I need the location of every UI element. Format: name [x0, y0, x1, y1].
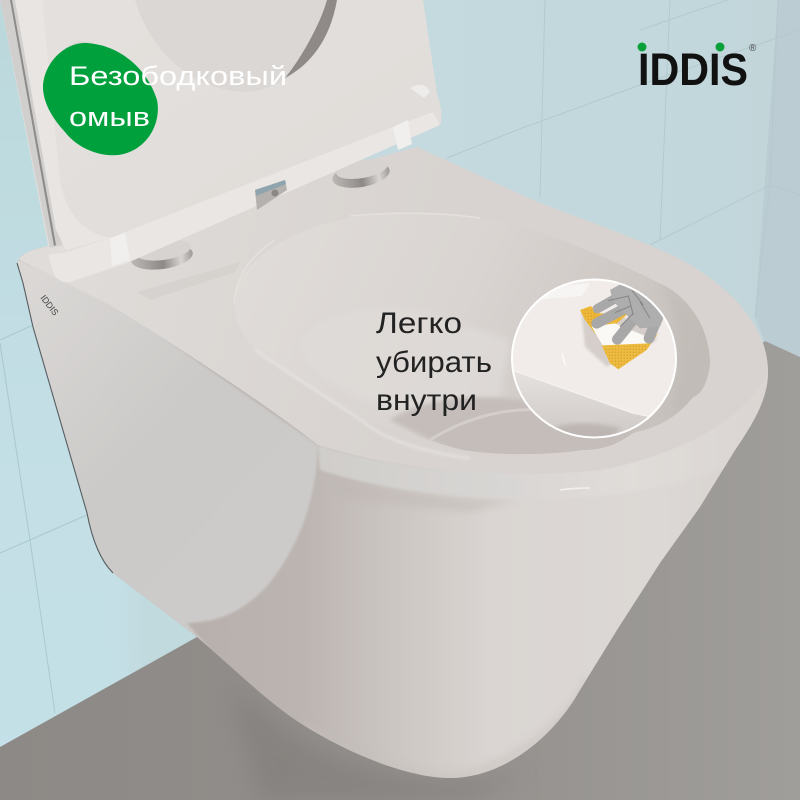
hinge left	[130, 236, 194, 273]
floor shadow under toilet	[230, 690, 540, 800]
toilet body	[0, 147, 770, 778]
rim shadow	[406, 498, 496, 510]
logo: IDDIS: ®	[749, 43, 757, 54]
rim front band	[318, 370, 770, 498]
seat clip	[255, 180, 287, 210]
sponge	[580, 283, 666, 369]
callout text: Легко	[376, 307, 462, 340]
floor	[0, 341, 800, 800]
inset circle: cleaning with sponge	[511, 278, 677, 438]
toilet bowl	[234, 213, 720, 460]
glove	[597, 294, 659, 339]
callout text: убирать	[376, 346, 492, 379]
logo: IDDIS: IDDIS	[638, 44, 748, 95]
callout text: внутри	[376, 384, 477, 417]
bottom edge shading	[476, 698, 574, 774]
badge heading: Безободковый	[69, 61, 287, 91]
top surface	[10, 147, 768, 474]
callout text	[376, 307, 492, 417]
rim highlight	[560, 488, 590, 490]
hinge right	[330, 156, 392, 192]
badge heading: омыв	[69, 102, 150, 132]
badge heading	[69, 61, 287, 132]
brand mark on ceramic: IDDIS	[38, 293, 60, 317]
left cool face	[0, 255, 318, 650]
toilet seat lid	[0, 0, 441, 282]
green badge	[43, 43, 158, 155]
